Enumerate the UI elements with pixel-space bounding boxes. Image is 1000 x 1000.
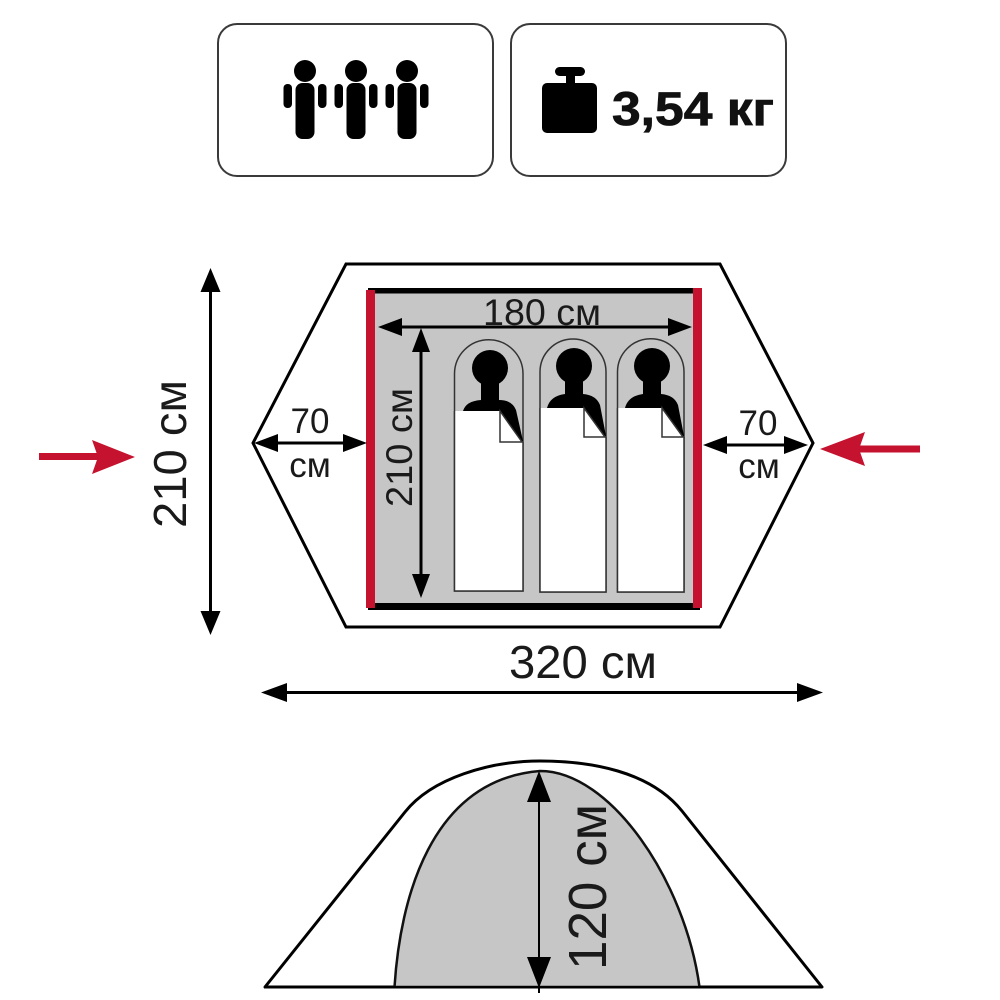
- arrow: inner length: [412, 328, 430, 598]
- panel: capacity: [218, 24, 493, 176]
- tent outline: [253, 264, 813, 627]
- arrow: left vestibule: [254, 434, 367, 452]
- arrow: inner width: [378, 318, 692, 336]
- inner tent floor: [368, 289, 700, 609]
- label: inner width: 180 см: [483, 292, 601, 333]
- panel: tent side view: [264, 761, 822, 993]
- label: right vestibule: 70: [739, 404, 777, 443]
- label: left vestibule: [289, 402, 331, 485]
- arrow: outer length: [261, 683, 823, 702]
- label: left vestibule: 70: [291, 402, 329, 441]
- base line: [264, 986, 822, 988]
- sleeping bag 3: [618, 339, 684, 592]
- label: outer depth: 210 см: [144, 380, 196, 528]
- arrow: right vestibule: [703, 436, 808, 454]
- label: left vestibule: см: [289, 446, 331, 485]
- label: inner length: 210 см: [379, 388, 420, 507]
- sleeping bag 1: [454, 340, 523, 591]
- label: right vestibule: [738, 404, 780, 486]
- arrow: peak height: [527, 771, 551, 993]
- arrow: left entrance: [39, 440, 135, 474]
- icon: weight: [542, 67, 597, 133]
- panel: weight: [511, 24, 786, 176]
- sleeping bag 2: [540, 339, 606, 592]
- inner dome: [394, 771, 700, 987]
- outer dome: [265, 761, 822, 987]
- panel: tent floor plan: [253, 264, 813, 627]
- label: outer length: 320 см: [509, 636, 657, 688]
- icon: three people: [284, 60, 428, 139]
- arrow: right entrance: [820, 432, 920, 466]
- weight value: 3,54 кг: [612, 82, 774, 135]
- arrow: outer depth: [200, 268, 220, 635]
- label: right vestibule: см: [738, 447, 780, 486]
- label: peak height: 120 см: [558, 804, 618, 970]
